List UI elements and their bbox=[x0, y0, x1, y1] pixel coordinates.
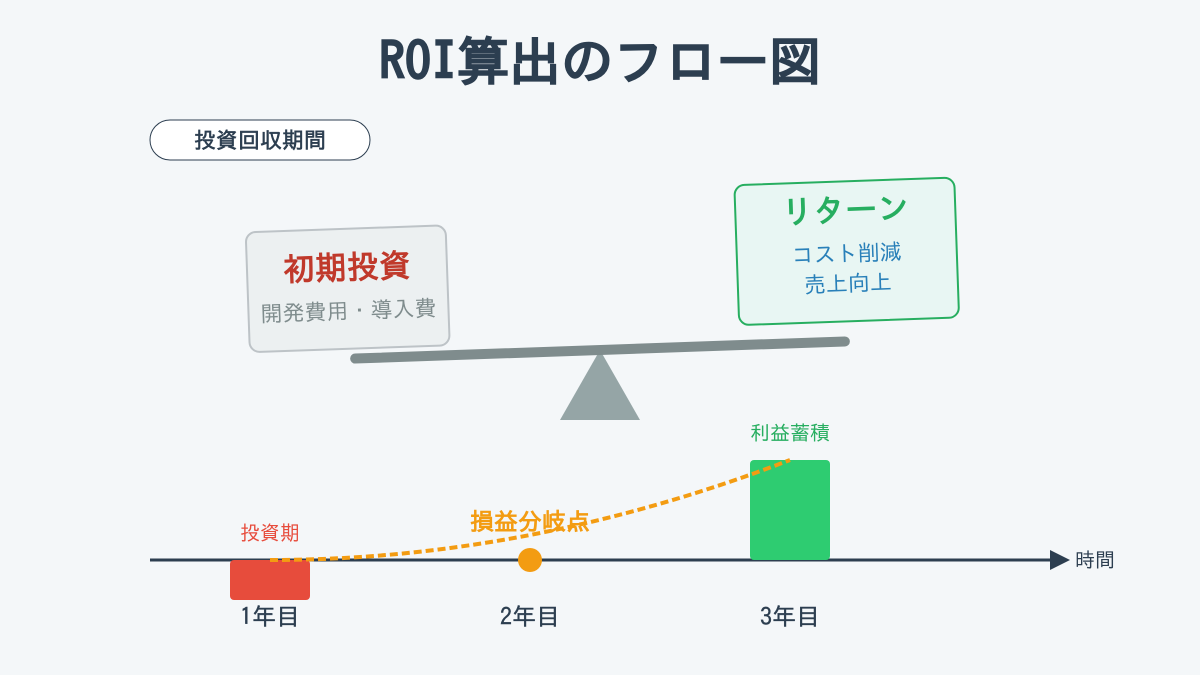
panel: initial investment bbox=[246, 225, 450, 352]
panel: return bbox=[734, 178, 959, 325]
label: year 1: 1年目 bbox=[240, 604, 300, 628]
bar: accumulated profit bbox=[750, 460, 830, 560]
seesaw beam bbox=[350, 336, 850, 364]
label: year 3: 3年目 bbox=[760, 604, 820, 628]
cumulative profit dashed curve bbox=[270, 460, 790, 560]
bar: investment period bbox=[230, 560, 310, 600]
label: break-even point: 損益分岐点 bbox=[470, 509, 590, 534]
seesaw fulcrum bbox=[560, 350, 640, 420]
panel: return: リターン bbox=[781, 191, 910, 228]
timeline axis arrow bbox=[150, 550, 1070, 570]
pill label: payback period: 投資回収期間 bbox=[194, 129, 326, 151]
panel: return: コスト削減 bbox=[791, 240, 902, 266]
break-even point marker bbox=[518, 548, 542, 572]
panel: initial investment: 初期投資 bbox=[282, 249, 411, 285]
label: investment period: 投資期 bbox=[240, 523, 300, 543]
label: accumulated profit: 利益蓄積 bbox=[750, 423, 830, 443]
panel: return: 売上向上 bbox=[803, 271, 892, 296]
panel: initial investment: 開発費用・導入費 bbox=[260, 297, 437, 325]
axis label: time: 時間 bbox=[1075, 550, 1115, 570]
title: ROI算出のフロー図 bbox=[379, 35, 821, 87]
pill label: payback period bbox=[150, 120, 370, 160]
seesaw: tilted beam and boxes bbox=[245, 178, 960, 367]
label: year 2: 2年目 bbox=[500, 604, 560, 628]
